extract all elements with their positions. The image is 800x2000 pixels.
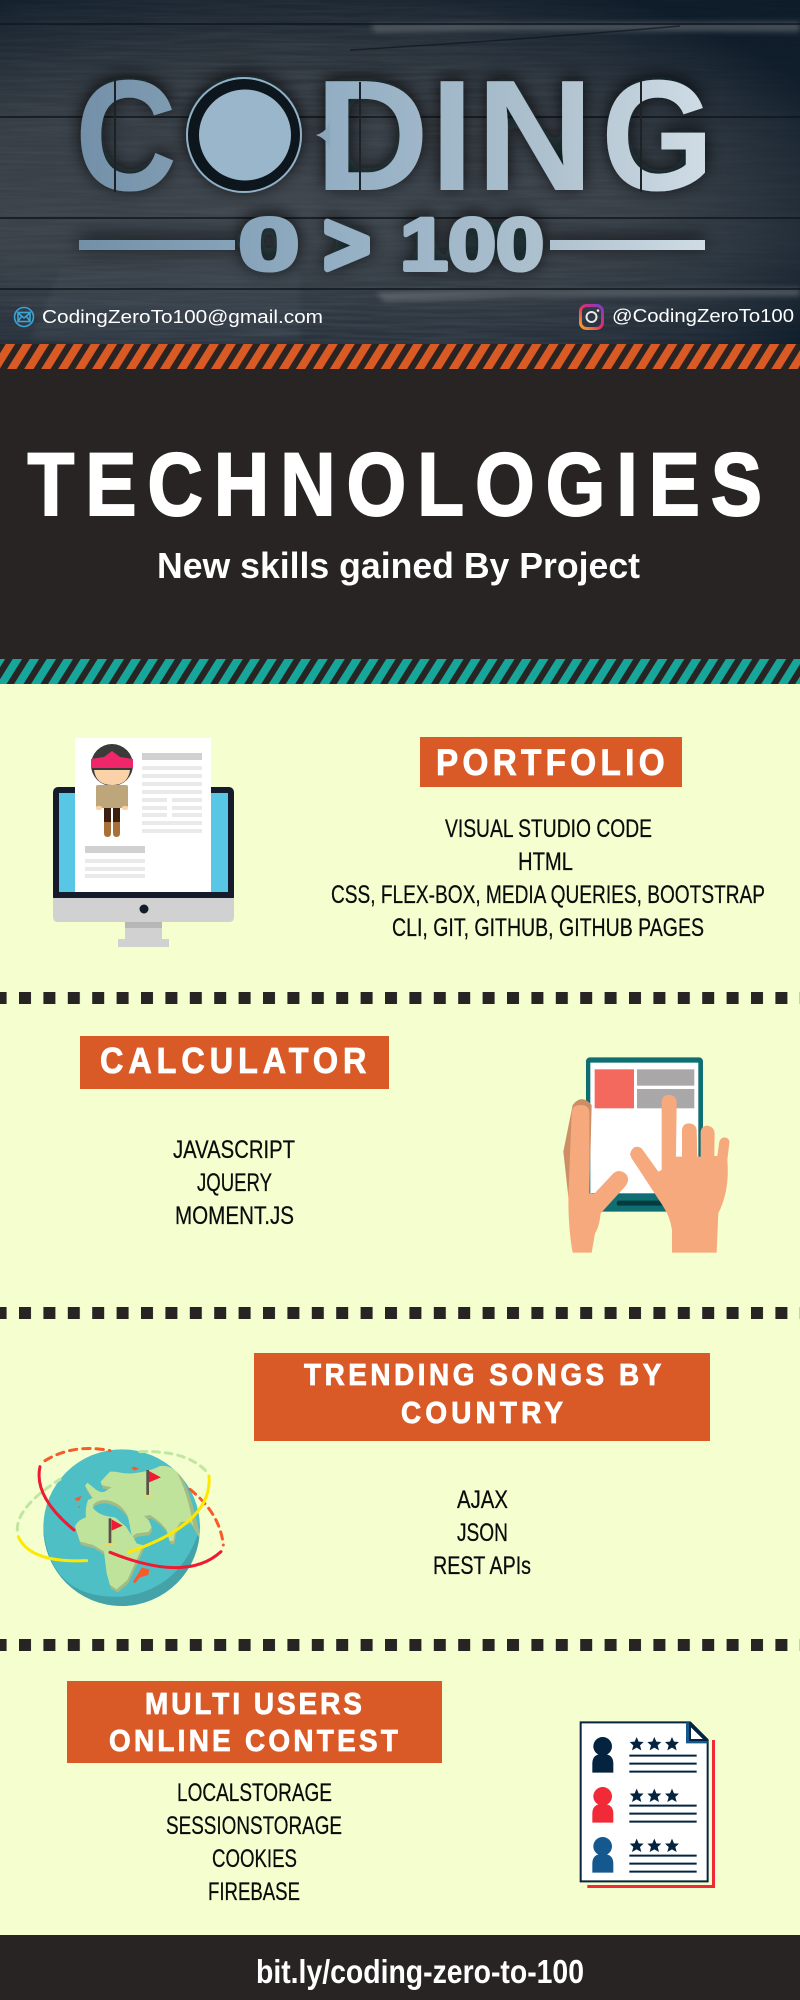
instagram contact: @CodingZeroTo100 xyxy=(612,305,794,326)
panel: footer link xyxy=(0,1935,800,2000)
skill list: portfolio: CLI, GIT, GITHUB, GITHUB PAGES xyxy=(392,914,704,942)
heading: multi users online contest: ONLINE CONTEST xyxy=(109,1724,398,1758)
heading: calculator xyxy=(80,1036,389,1089)
panel: title band xyxy=(0,344,800,684)
email contact: CodingZeroTo100@gmail.com xyxy=(42,306,323,327)
panel: footer link: bit.ly/coding-zero-to-100 xyxy=(256,1953,584,1990)
icon: monitor with resume xyxy=(53,738,234,947)
heading: calculator: CALCULATOR xyxy=(100,1041,367,1081)
skill list: portfolio: VISUAL STUDIO CODE xyxy=(445,815,652,843)
logo word CODING: G xyxy=(601,48,714,224)
skill list: portfolio xyxy=(331,815,765,942)
logo word CODING: C xyxy=(75,48,177,224)
panel: calculator xyxy=(80,1036,729,1253)
logo word CODING: O xyxy=(187,48,302,224)
icon: mail xyxy=(14,308,34,326)
heading: trending songs by country: COUNTRY xyxy=(401,1396,563,1430)
heading: multi users online contest: MULTI USERS xyxy=(145,1687,362,1721)
panel: multi users online contest xyxy=(67,1681,715,1906)
instagram contact xyxy=(580,305,794,328)
skill list: portfolio: HTML xyxy=(518,848,573,876)
skill list: contest: COOKIES xyxy=(212,1845,297,1873)
subtitle: New skills gained By Project xyxy=(157,545,640,586)
skill list: calculator: JQUERY xyxy=(197,1169,272,1197)
skill list: calculator: JAVASCRIPT xyxy=(173,1136,295,1164)
skill list: contest: LOCALSTORAGE xyxy=(177,1779,332,1807)
logo tagline 0 > 100: 100 xyxy=(400,203,544,286)
skill list: contest: SESSIONSTORAGE xyxy=(166,1812,342,1840)
logo tagline 0 > 100: > xyxy=(324,197,370,293)
title: TECHNOLOGIES xyxy=(28,435,762,534)
skill list: calculator: MOMENT.JS xyxy=(175,1202,294,1230)
heading: multi users online contest xyxy=(67,1681,442,1763)
panel: portfolio xyxy=(53,737,765,947)
skill list: calculator xyxy=(173,1136,295,1230)
skill list: trending songs: JSON xyxy=(457,1519,508,1547)
wood background xyxy=(0,0,800,345)
heading: trending songs by country xyxy=(254,1353,710,1441)
panel: logo header xyxy=(0,0,800,345)
skill list: contest xyxy=(166,1779,342,1906)
skill list: trending songs xyxy=(433,1486,531,1580)
icon: instagram xyxy=(580,306,602,328)
heading: trending songs by country: TRENDING SONGS BY xyxy=(304,1358,662,1392)
logo word CODING: D xyxy=(315,48,429,224)
logo word CODING: I xyxy=(430,48,474,224)
logo word CODING xyxy=(75,48,714,224)
icon: globe with flags xyxy=(17,1448,223,1617)
icon: hands on tablet xyxy=(563,1057,729,1253)
logo word CODING: N xyxy=(476,48,594,224)
heading: portfolio: PORTFOLIO xyxy=(436,742,665,783)
logo tagline 0 > 100 xyxy=(79,197,705,293)
logo tagline 0 > 100: 0 xyxy=(238,203,300,286)
skill list: trending songs: AJAX xyxy=(457,1486,508,1514)
skill list: trending songs: REST APIs xyxy=(433,1552,531,1580)
icon: ranking document xyxy=(581,1722,715,1888)
skill list: contest: FIREBASE xyxy=(208,1878,300,1906)
panel: trending songs by country xyxy=(17,1353,710,1617)
